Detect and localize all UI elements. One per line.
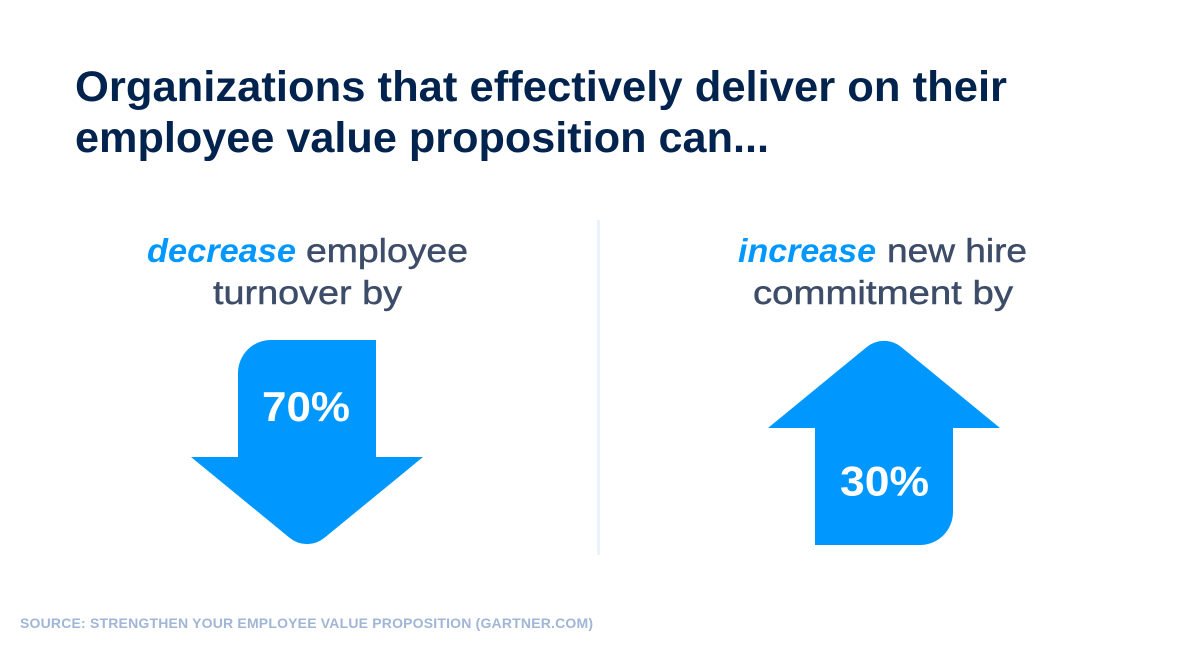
icon: down arrow 70% bbox=[191, 340, 423, 544]
title: Organizations that effectively deliver on their bbox=[75, 64, 1007, 111]
heading: increase new hire commitment by: commitment by bbox=[753, 274, 1014, 311]
panel: increase commitment bbox=[738, 232, 1027, 545]
icon: down arrow 70%: 70% bbox=[262, 383, 350, 430]
title: employee value proposition can... bbox=[75, 115, 769, 162]
heading: increase new hire commitment by: increase bbox=[738, 232, 876, 269]
heading: decrease employee turnover by bbox=[147, 232, 468, 311]
panel: decrease turnover bbox=[147, 232, 468, 544]
title bbox=[75, 64, 1007, 162]
source note: SOURCE: STRENGTHEN YOUR EMPLOYEE VALUE PROPOSITION (GARTNER.COM) bbox=[20, 615, 593, 631]
heading: increase new hire commitment by bbox=[738, 232, 1027, 311]
heading: increase new hire commitment by: new hire bbox=[887, 232, 1027, 269]
heading: decrease employee turnover by: turnover by bbox=[213, 274, 403, 311]
icon: up arrow 30%: 30% bbox=[840, 458, 929, 504]
icon: up arrow 30% bbox=[768, 341, 1000, 545]
heading: decrease employee turnover by: employee bbox=[306, 232, 468, 269]
heading: decrease employee turnover by: decrease bbox=[147, 232, 296, 269]
